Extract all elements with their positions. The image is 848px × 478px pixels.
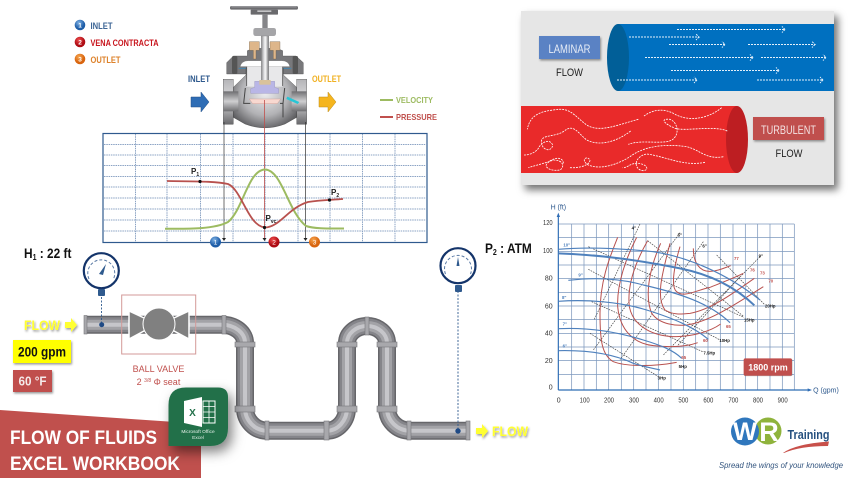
laminar label: LAMINAR xyxy=(548,44,590,56)
badge: temperature: 60 °F xyxy=(18,374,47,388)
pressure points: P xyxy=(191,167,196,176)
banner: workbook title: FLOW OF FLUIDS xyxy=(10,428,157,449)
pressure points: 1 xyxy=(196,172,199,178)
axis labels: 0 xyxy=(549,385,553,392)
chart: pump performance curves: 200 xyxy=(604,397,614,404)
label: outlet pressure: 2 xyxy=(493,248,497,257)
chart legend: velocity and pressure: PRESSURE xyxy=(396,112,437,122)
curve annotations: 77 xyxy=(734,256,739,261)
axis labels: 80 xyxy=(545,276,553,283)
turbulent label: TURBULENT xyxy=(761,125,816,137)
chart: pump performance curves: 800 xyxy=(753,397,763,404)
turbulent label xyxy=(753,117,824,160)
legend item: outlet: OUTLET xyxy=(90,55,121,65)
label: ball valve xyxy=(133,364,184,387)
icon: microsoft excel xyxy=(168,388,228,446)
chart: pump performance curves: 700 xyxy=(728,397,738,404)
badge: flow rate xyxy=(13,340,71,363)
label: outlet with arrow xyxy=(312,74,341,112)
curve annotations: 3Hp xyxy=(658,376,666,381)
impeller head curves xyxy=(558,248,760,370)
banner: workbook title: EXCEL WORKBOOK xyxy=(10,454,180,475)
label: inlet with arrow xyxy=(188,74,210,112)
label: ball valve: Φ seat xyxy=(151,377,181,387)
label: ball valve: BALL VALVE xyxy=(133,364,184,374)
label: outlet pressure: : ATM xyxy=(497,240,532,256)
label: outlet pressure: P xyxy=(485,240,493,256)
label: inlet head: : 22 ft xyxy=(36,245,72,261)
pump axes xyxy=(558,215,809,390)
label: ball valve: 2 xyxy=(137,377,142,387)
chart: pump performance curves: Q (gpm) xyxy=(813,388,839,395)
icon: globe valve cross-section xyxy=(223,6,307,128)
curve annotations: 7" xyxy=(563,321,567,326)
chart: pump performance curves: H (ft) xyxy=(551,204,566,211)
chart: pump performance curves: 400 xyxy=(654,397,664,404)
laminar label xyxy=(539,36,600,79)
pressure points xyxy=(191,167,339,229)
laminar label: FLOW xyxy=(556,67,584,79)
legend item: vena contracta: VENA CONTRACTA xyxy=(90,38,159,48)
rpm badge xyxy=(744,358,792,376)
badge: flow rate: 200 gpm xyxy=(18,344,66,360)
curve annotations: 10Hp xyxy=(719,338,730,343)
chart markers 1 2 3: 2 xyxy=(272,240,276,246)
curve annotations: 20Hp xyxy=(765,304,776,309)
icon: outlet pressure gauge xyxy=(440,248,476,434)
banner: workbook title xyxy=(0,410,201,478)
axis labels: 20 xyxy=(545,358,553,365)
curve annotations: 10" xyxy=(563,242,570,247)
curve annotations: 70 xyxy=(768,279,774,284)
chart: pump performance curves: 900 xyxy=(778,397,788,404)
icon: inlet pressure gauge xyxy=(84,253,119,327)
axis labels: 60 xyxy=(545,303,553,310)
legend: numbered points xyxy=(75,20,159,65)
label: inlet head: H xyxy=(24,245,33,261)
legend item: inlet: INLET xyxy=(90,21,113,31)
label: flow in: FLOW xyxy=(24,317,61,333)
curve annotations: 9" xyxy=(578,272,583,277)
pipe joints xyxy=(84,316,470,440)
panel: laminar and turbulent flow xyxy=(521,11,834,185)
icon: ball valve xyxy=(122,295,196,354)
turbulent pipe xyxy=(521,106,748,173)
rpm badge: 1800 rpm xyxy=(748,363,788,373)
badge: temperature xyxy=(13,370,52,392)
curve annotations: 6" xyxy=(563,344,567,349)
curve annotations xyxy=(562,225,776,381)
pressure points: vc xyxy=(271,219,277,225)
constant power and diameter dashed lines xyxy=(588,224,765,377)
curve annotations: 5" xyxy=(678,233,682,238)
laminar pipe xyxy=(607,24,834,91)
curve annotations: 6" xyxy=(702,244,707,249)
chart: pump performance curves xyxy=(543,204,839,404)
curve annotations: 76 xyxy=(750,268,755,273)
legend item: vena contracta: 2 xyxy=(78,40,82,46)
legend item: inlet: 1 xyxy=(78,22,82,30)
chart: pump performance curves: 600 xyxy=(703,397,713,404)
curve annotations: 55 xyxy=(681,355,687,360)
turbulent label: FLOW xyxy=(776,148,803,160)
curve annotations: 15Hp xyxy=(744,318,755,323)
label: inlet head: 1 xyxy=(33,253,36,262)
axis labels: 120 xyxy=(543,220,553,227)
legend item: outlet: 3 xyxy=(78,56,82,64)
curve annotations: 4" xyxy=(632,225,636,230)
chart: pump performance curves: 0 xyxy=(557,397,561,404)
piping system xyxy=(84,316,470,440)
pressure points: P xyxy=(266,214,271,223)
chart: pump performance curves: 300 xyxy=(629,397,639,404)
curve annotations: 73 xyxy=(760,271,765,276)
label: inlet with arrow: INLET xyxy=(188,74,210,84)
legend item: inlet xyxy=(75,20,113,31)
label: ball valve: 3/8 xyxy=(144,378,151,384)
axis labels xyxy=(543,220,553,392)
chart markers 1 2 3: 1 xyxy=(214,240,218,246)
chart: velocity and pressure through valve xyxy=(103,100,427,248)
label: flow out xyxy=(476,423,529,439)
label: outlet with arrow: OUTLET xyxy=(312,74,341,84)
icon: microsoft excel: Microsoft Office xyxy=(181,429,215,435)
curve annotations: 7.5Hp xyxy=(703,351,715,356)
velocity curve xyxy=(165,170,344,229)
chart legend: velocity and pressure xyxy=(380,95,437,122)
icon: microsoft excel: X xyxy=(189,408,196,419)
pressure points: 2 xyxy=(336,193,339,199)
label: flow out: FLOW xyxy=(492,423,529,439)
curve annotations: 5Hp xyxy=(679,364,687,369)
curve annotations: 9" xyxy=(759,253,763,258)
logo: WR Training: R xyxy=(759,417,779,447)
curve annotations: 60 xyxy=(703,338,708,343)
axis labels: 40 xyxy=(545,331,553,338)
curve annotations: 65 xyxy=(726,324,731,329)
pressure curve xyxy=(167,181,343,228)
legend item: outlet xyxy=(75,54,121,65)
legend item: vena contracta xyxy=(75,37,159,48)
logo: WR Training: Training xyxy=(788,427,830,442)
pressure points: P xyxy=(331,188,336,197)
icon: microsoft excel: Excel xyxy=(192,435,204,441)
chart: pump performance curves: 100 xyxy=(580,397,590,404)
axis labels: 100 xyxy=(543,248,553,255)
efficiency curves xyxy=(600,237,763,366)
logo: WR Training: W xyxy=(733,418,757,446)
chart legend: velocity and pressure: VELOCITY xyxy=(396,95,433,105)
chart: pump performance curves: 500 xyxy=(678,397,688,404)
chart markers 1 2 3 xyxy=(210,236,320,248)
curve annotations: 8" xyxy=(562,295,566,300)
chart markers 1 2 3: 3 xyxy=(313,240,317,246)
logo: WR Training xyxy=(719,417,843,470)
